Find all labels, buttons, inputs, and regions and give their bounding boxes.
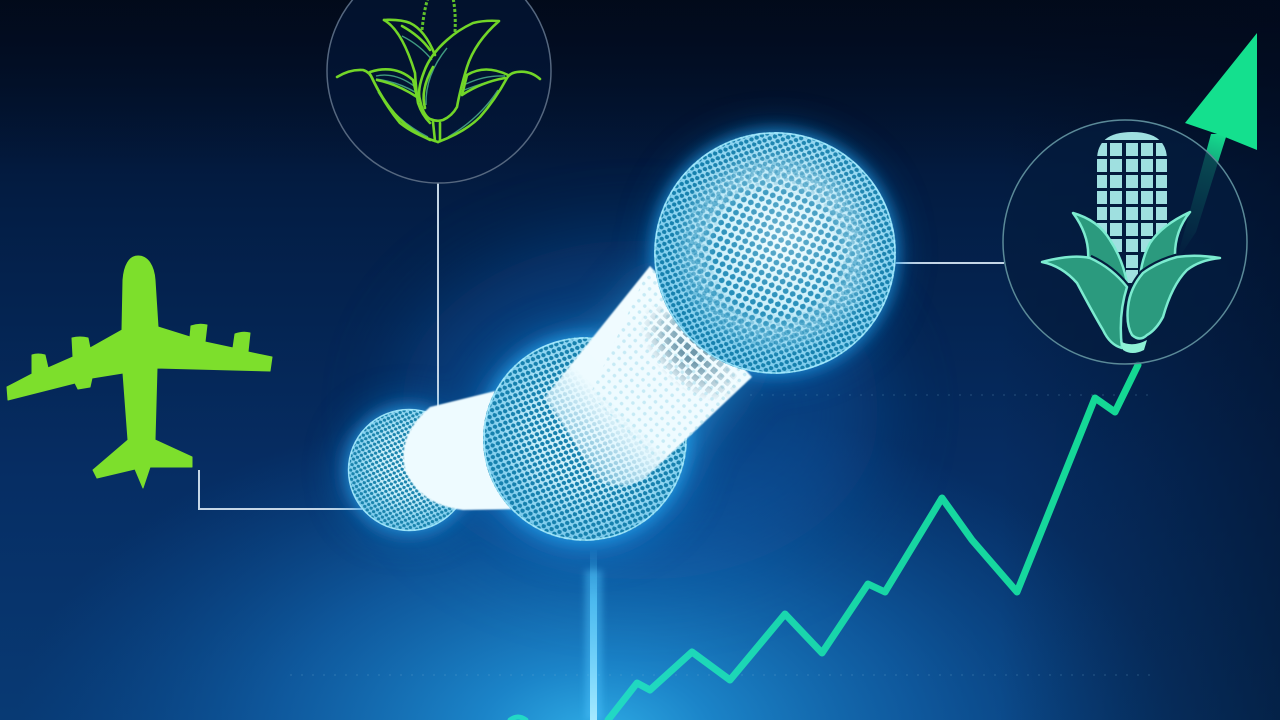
- plant stalk outline: [422, 0, 455, 32]
- large sphere: [654, 132, 896, 374]
- connector: plane to molecule: [199, 470, 362, 509]
- plant leaves: [337, 20, 540, 142]
- long mesh tube: [545, 266, 752, 486]
- short glowing tube: [403, 391, 525, 510]
- corn husk leaves: [1042, 212, 1220, 348]
- vertical light beam: [585, 550, 602, 720]
- lower middle sphere: [483, 337, 687, 541]
- icon: airplane: [7, 256, 272, 488]
- plant leaf veins: [376, 36, 505, 137]
- molecule: [345, 129, 899, 548]
- icon: plant in circle: [327, 0, 551, 183]
- connector: molecule to corn: [895, 262, 1004, 264]
- faint dotted grid lines: [290, 395, 1156, 675]
- growth arrow: [1176, 33, 1257, 262]
- corn base: [1120, 340, 1147, 353]
- connector: plant to molecule: [437, 183, 439, 408]
- icon: corn in circle: [1003, 120, 1247, 364]
- small sphere: [348, 409, 470, 531]
- growth line chart: [510, 365, 1138, 720]
- molecule glow: [345, 129, 899, 548]
- corn cob kernels: [1097, 132, 1167, 283]
